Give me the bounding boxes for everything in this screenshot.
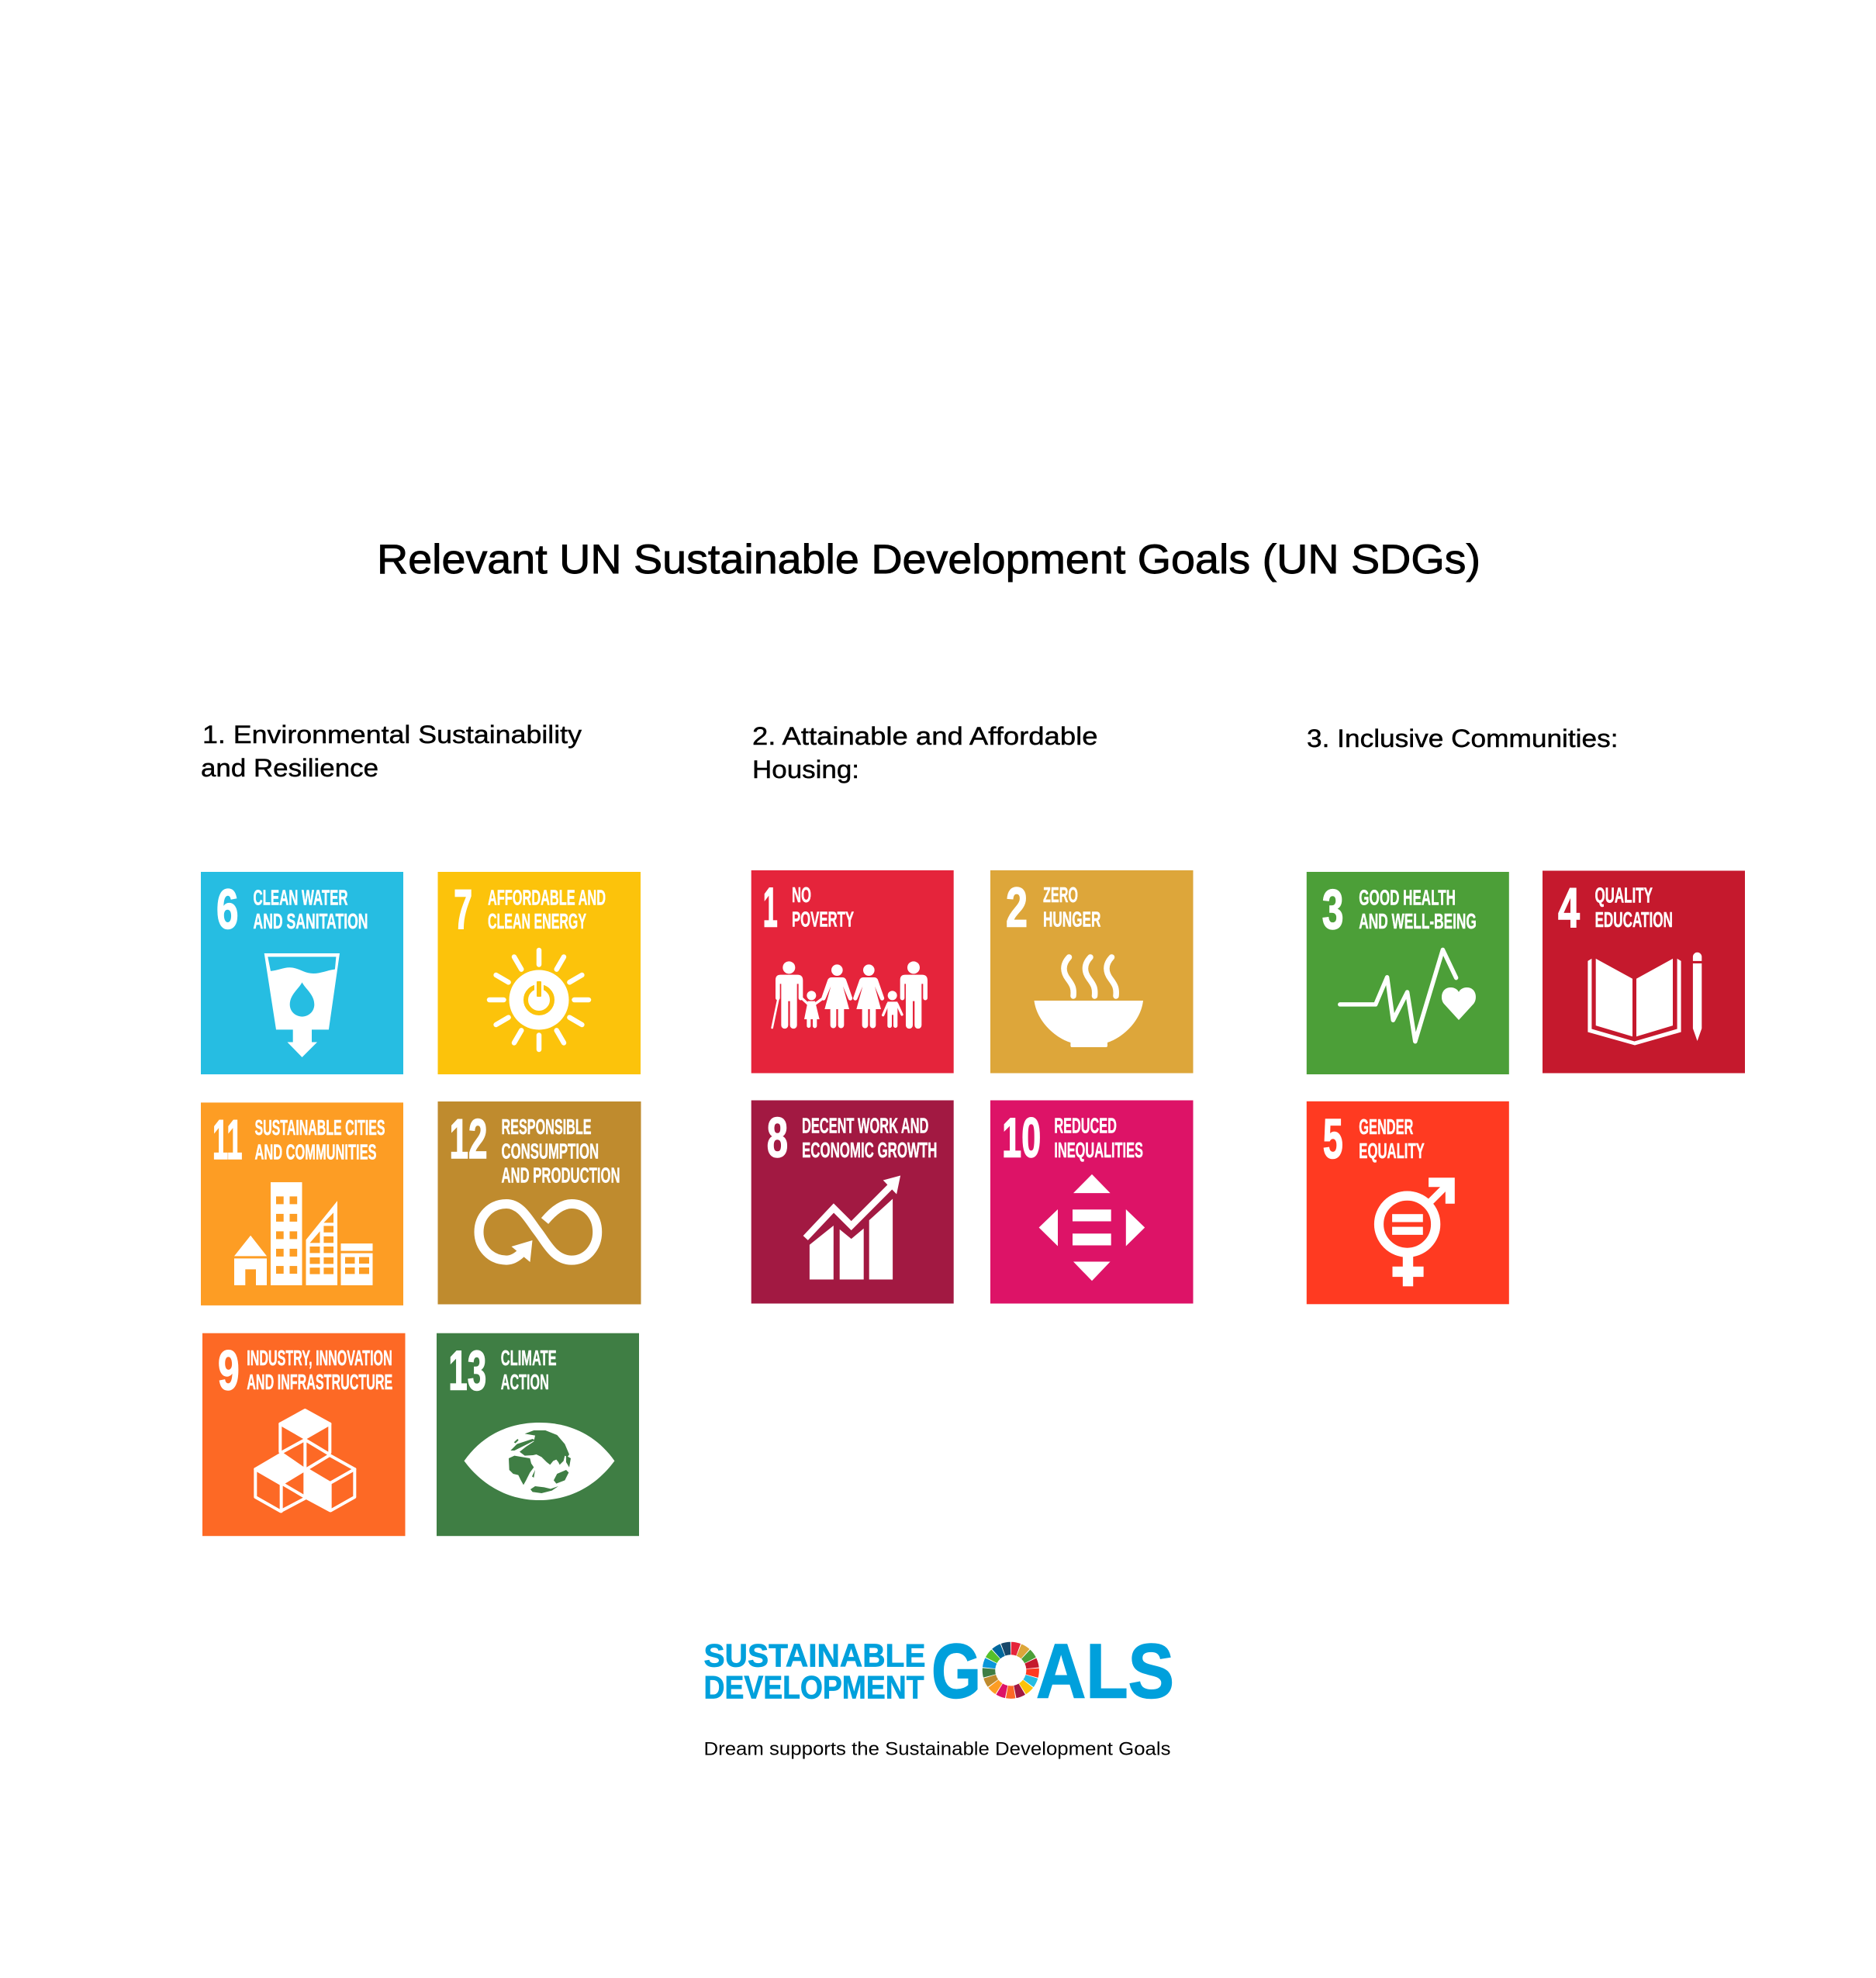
- goal 3 title: [1359, 885, 1477, 933]
- goal 7 title: AFFORDABLE AND: [488, 885, 606, 909]
- panel: goal 12 responsible consumption and production: [437, 1101, 641, 1305]
- goal 1 title: NO: [792, 883, 811, 907]
- panel: goal 11 sustainable cities and communities: [201, 1102, 403, 1305]
- goal 13 title: ACTION: [501, 1370, 549, 1394]
- heading: attainable and affordable housing: Housing:: [752, 756, 859, 783]
- icon: water glass with drop and arrow: [264, 953, 340, 1057]
- goal 11 title: [254, 1115, 385, 1164]
- goal 1 title: [792, 883, 854, 931]
- panel: goal 1 no poverty: 1: [763, 877, 778, 939]
- panel: goal 5 gender equality: [1307, 1101, 1509, 1304]
- panel: goal 8 decent work and economic growth: [751, 1100, 954, 1303]
- icon: family of six: [772, 961, 928, 1029]
- goal 10 title: REDUCED: [1054, 1114, 1117, 1137]
- goal 9 title: INDUSTRY, INNOVATION: [247, 1346, 392, 1370]
- goal 13 title: [501, 1346, 557, 1394]
- logo wordmark: SUSTAINABLE: [704, 1637, 926, 1674]
- panel: goal 3 good health and well-being: [1307, 872, 1509, 1074]
- goal 2 title: ZERO: [1043, 883, 1078, 907]
- goal 2 title: HUNGER: [1043, 908, 1100, 931]
- goal 9 title: AND INFRASTRUCTURE: [247, 1370, 392, 1394]
- goal 12 title: RESPONSIBLE: [501, 1115, 591, 1139]
- heading: environmental sustainability and resilience: 1. Environmental Sustainability: [202, 721, 582, 749]
- heading: environmental sustainability and resilience: [201, 721, 582, 782]
- panel: goal 9 industry, innovation and infrastructure: 9: [218, 1340, 240, 1402]
- goal 8 title: [802, 1114, 937, 1162]
- goal 12 title: [501, 1115, 620, 1188]
- panel: goal 6 clean water and sanitation: [201, 872, 403, 1074]
- panel: goal 6 clean water and sanitation: 6: [216, 879, 239, 941]
- icon: sun with power symbol: [489, 950, 589, 1050]
- heading: attainable and affordable housing: [752, 722, 1098, 783]
- goal 13 title: CLIMATE: [501, 1346, 557, 1370]
- icon: stacked cubes: [255, 1410, 354, 1511]
- logo: sustainable development goals: [704, 1627, 1174, 1714]
- panel: goal 13 climate action: [437, 1333, 639, 1536]
- panel: goal 4 quality education: 4: [1558, 877, 1580, 939]
- icon: open book and pencil: [1588, 953, 1702, 1046]
- heading: environmental sustainability and resilience: and Resilience: [201, 754, 378, 782]
- goal 6 title: CLEAN WATER: [253, 885, 348, 909]
- logo wordmark: G: [931, 1627, 981, 1714]
- goal 9 title: [247, 1346, 392, 1394]
- goal 1 title: POVERTY: [792, 908, 854, 931]
- goal 6 title: [253, 885, 368, 933]
- panel: goal 12 responsible consumption and production: 12: [450, 1108, 487, 1171]
- goal 4 title: [1594, 884, 1673, 932]
- logo wordmark: DEVELOPMENT: [704, 1669, 924, 1705]
- heading: inclusive communities: 3. Inclusive Communities:: [1307, 724, 1618, 752]
- panel: goal 7 affordable and clean energy: 7: [454, 879, 472, 941]
- panel: goal 10 reduced inequalities: 10: [1002, 1108, 1041, 1170]
- icon: infinity loop with arrow: [479, 1204, 597, 1262]
- goal 5 title: GENDER: [1359, 1115, 1413, 1139]
- goal 4 title: QUALITY: [1594, 884, 1653, 908]
- goal 7 title: CLEAN ENERGY: [488, 909, 586, 933]
- panel: goal 13 climate action: 13: [448, 1340, 486, 1402]
- goal 12 title: AND PRODUCTION: [501, 1164, 620, 1188]
- panel: goal 2 zero hunger: 2: [1006, 877, 1028, 939]
- goal 10 title: [1054, 1114, 1143, 1162]
- goal 10 title: INEQUALITIES: [1054, 1138, 1143, 1162]
- icon: heartbeat line and heart: [1340, 949, 1476, 1042]
- goal 12 title: CONSUMPTION: [501, 1139, 599, 1163]
- panel: goal 7 affordable and clean energy: [437, 872, 641, 1074]
- panel: goal 3 good health and well-being: 3: [1322, 879, 1344, 941]
- panel: goal 10 reduced inequalities: [990, 1100, 1193, 1303]
- icon: city buildings: [234, 1182, 372, 1285]
- title: Relevant UN Sustainable Development Goals (UN SDGs): [377, 537, 1480, 583]
- icon: arrows around equals sign: [1039, 1174, 1145, 1281]
- goal 3 title: AND WELL-BEING: [1359, 909, 1477, 933]
- panel: goal 9 industry, innovation and infrastructure: [202, 1333, 405, 1536]
- goal 2 title: [1043, 883, 1100, 931]
- goal 5 title: [1359, 1115, 1425, 1163]
- panel: goal 4 quality education: [1543, 870, 1745, 1074]
- icon: eye with globe: [464, 1423, 614, 1500]
- panel: goal 11 sustainable cities and communities: 11: [212, 1109, 242, 1171]
- goal 11 title: SUSTAINABLE CITIES: [254, 1115, 385, 1139]
- panel: goal 8 decent work and economic growth: 8: [767, 1108, 788, 1170]
- heading: attainable and affordable housing: 2. Attainable and Affordable: [752, 722, 1098, 750]
- goal 8 title: ECONOMIC GROWTH: [802, 1138, 937, 1162]
- goal 3 title: GOOD HEALTH: [1359, 885, 1456, 909]
- panel: goal 5 gender equality: 5: [1323, 1108, 1343, 1171]
- icon: steaming bowl: [1035, 957, 1143, 1047]
- goal 8 title: DECENT WORK AND: [802, 1114, 928, 1137]
- goal 7 title: [488, 885, 606, 933]
- panel: goal 2 zero hunger: [990, 870, 1193, 1074]
- icon: growth bar chart with arrow: [806, 1176, 900, 1280]
- goal 4 title: EDUCATION: [1594, 908, 1673, 932]
- icon: gender symbol with equals sign: [1379, 1177, 1455, 1286]
- logo wordmark: ALS: [1036, 1627, 1174, 1714]
- logo wordmark: [704, 1627, 1174, 1714]
- goal 11 title: AND COMMUNITIES: [254, 1139, 377, 1164]
- goal 6 title: AND SANITATION: [253, 909, 368, 933]
- icon: SDG colour wheel: [979, 1639, 1042, 1701]
- goal 5 title: EQUALITY: [1359, 1139, 1425, 1163]
- caption: dream supports the goals: Dream supports the Sustainable Development Goals: [704, 1739, 1171, 1759]
- panel: goal 1 no poverty: [751, 870, 954, 1074]
